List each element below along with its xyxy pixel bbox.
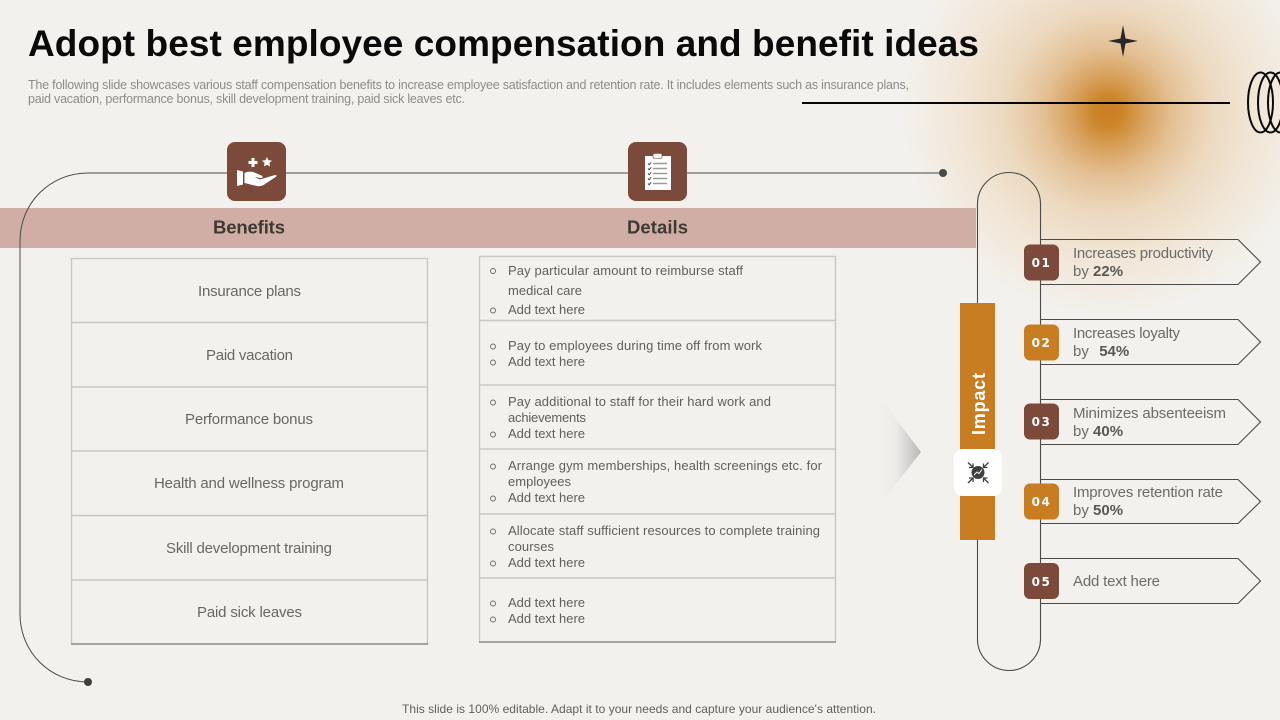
panel: details table: Add text here [508, 595, 585, 610]
panel: benefits table [71, 258, 428, 644]
panel: benefits table: Paid sick leaves [197, 604, 302, 621]
subtitle [28, 78, 909, 106]
heading: Details: Details [627, 216, 688, 238]
callout 04: Improves retention rate [1073, 484, 1223, 501]
panel: details table: achievements [508, 410, 586, 425]
arrow: fading chevron [878, 395, 921, 507]
panel: details table: employees [508, 474, 572, 489]
connector line with end dots [20, 169, 947, 686]
panel: details table: Add text here [508, 302, 585, 317]
panel: details table: Add text here [508, 490, 585, 505]
icon: four-point sparkle [1108, 25, 1138, 57]
decorative orange glow [903, 0, 1280, 312]
subtitle: paid vacation, performance bonus, skill development training, paid sick leaves etc. [28, 92, 465, 106]
panel: details table: Add text here [508, 555, 585, 570]
icon: overlapping ovals [1248, 72, 1280, 132]
panel: benefits table: Skill development training [166, 540, 332, 557]
callout 01 [1024, 240, 1260, 284]
callout 01: 01 [1032, 256, 1051, 270]
callout 04: 04 [1032, 495, 1051, 509]
callout 04 [1024, 480, 1260, 524]
callout 01: Increases productivity [1073, 245, 1214, 262]
panel: details table: Add text here [508, 354, 585, 369]
panel: benefits table: Performance bonus [185, 411, 313, 428]
callout 03: 03 [1032, 415, 1051, 429]
footer note: This slide is 100% editable. Adapt it to your needs and capture your audience's attention. [402, 702, 876, 716]
impact bar [960, 303, 995, 540]
panel: benefits table: Insurance plans [198, 283, 301, 300]
callout 02: 02 [1032, 336, 1051, 350]
icon: hand with stars [227, 142, 286, 201]
impact bar: Impact [969, 373, 989, 435]
callout 05 [1024, 558, 1260, 604]
callout 05: Add text here [1073, 573, 1160, 590]
icon: clipboard checklist [628, 142, 687, 201]
title: Adopt best employee compensation and benefit ideas [28, 23, 979, 64]
heading: Benefits: Benefits [213, 216, 285, 238]
panel: details table: medical care [508, 283, 582, 298]
panel: details table [479, 256, 836, 642]
callout 03: Minimizes absenteeism [1073, 405, 1226, 422]
callout 02 [1024, 320, 1260, 364]
callout 02: Increases loyalty [1073, 325, 1180, 342]
icon: impact arrows and chart [954, 449, 1002, 496]
panel: details table: Pay additional to staff for their hard work and [508, 394, 771, 409]
callout 01: by 22% [1073, 263, 1123, 280]
callout 03 [1024, 400, 1260, 444]
panel: details table: Pay particular amount to reimburse staff [508, 263, 743, 278]
pill outline [978, 172, 1040, 670]
callout 03: by 40% [1073, 423, 1123, 440]
panel: details table: Arrange gym memberships, health screenings etc. for [508, 458, 823, 473]
accent rule [802, 102, 1230, 104]
callout 04: by 50% [1073, 502, 1123, 519]
panel: benefits table: Paid vacation [206, 347, 293, 364]
subtitle: The following slide showcases various staff compensation benefits to increase employee satisfaction and retention rate. It includes elements such as insurance plans, [28, 78, 909, 92]
panel: details table: courses [508, 539, 554, 554]
panel: details table: Pay to employees during time off from work [508, 338, 762, 353]
callout 02: by 54% [1073, 343, 1129, 360]
panel: details table: Add text here [508, 611, 585, 626]
panel: details table: Allocate staff sufficient resources to complete training [508, 523, 820, 538]
header band [0, 208, 976, 248]
panel: details table: Add text here [508, 426, 585, 441]
panel: benefits table: Health and wellness program [154, 475, 344, 492]
callout 05: 05 [1032, 575, 1051, 589]
